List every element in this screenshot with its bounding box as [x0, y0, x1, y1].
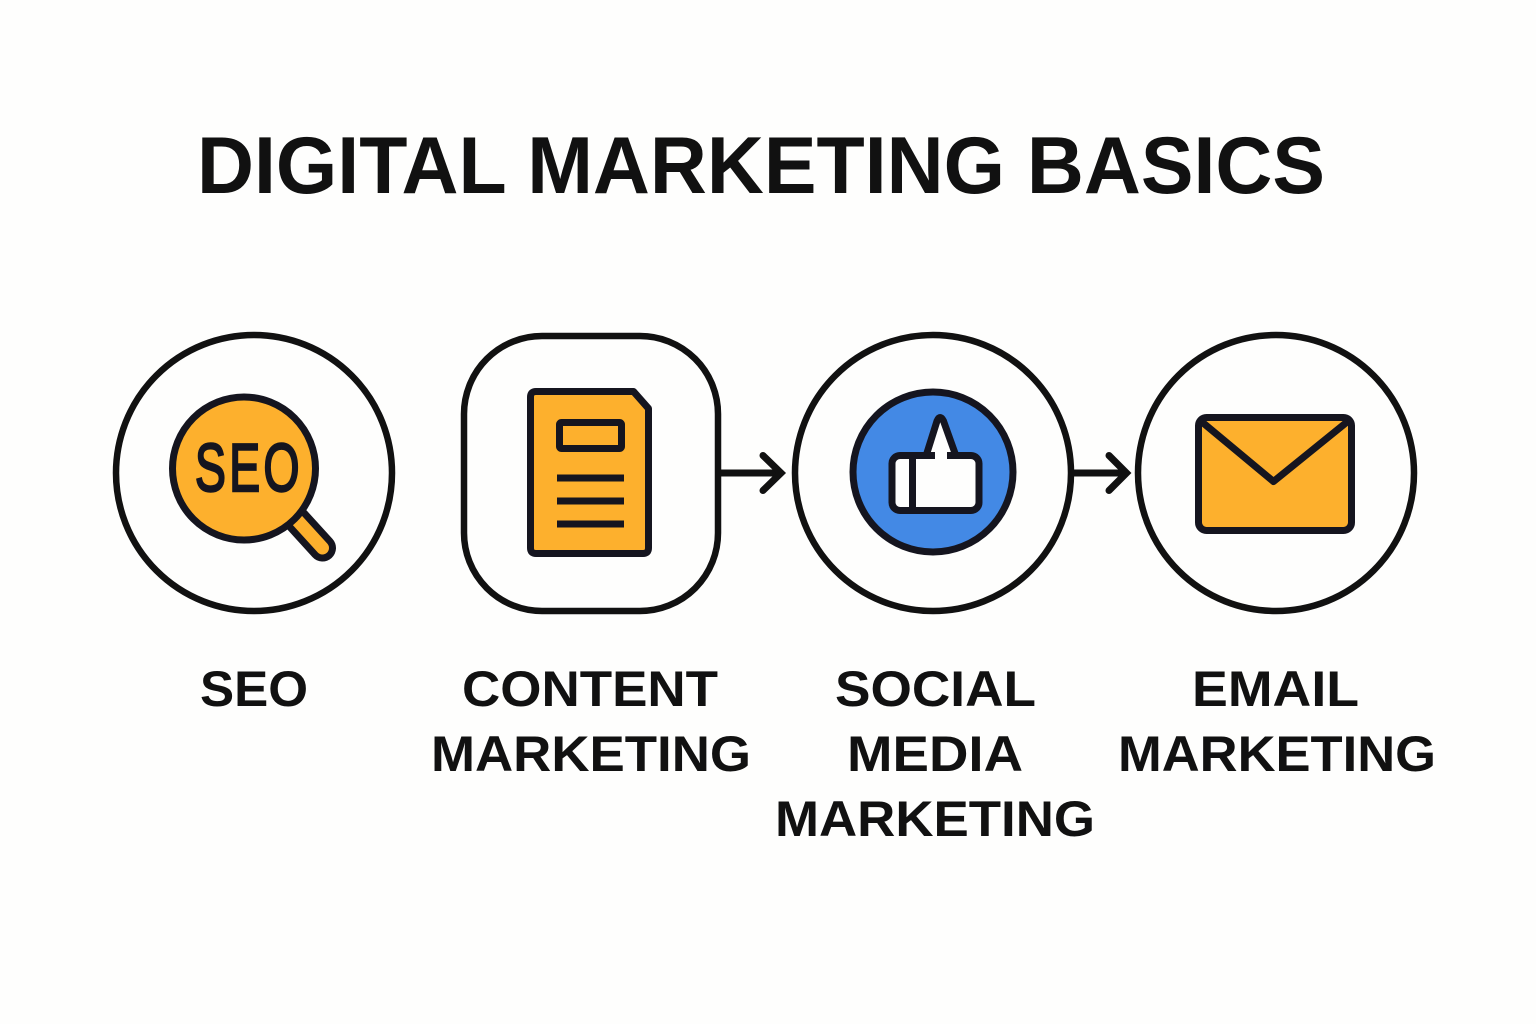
circle: SEO: [116, 335, 392, 611]
icon: document: [530, 392, 648, 554]
label: social media marketing: MARKETING: [775, 791, 1095, 847]
label: social media marketing: MEDIA: [847, 726, 1022, 782]
icon: SEO magnifier: SEO: [195, 430, 303, 506]
label: content marketing: CONTENT: [462, 661, 718, 717]
step: social media marketing: [775, 335, 1095, 847]
step: email marketing: [1118, 335, 1436, 782]
arrow: content to social: [720, 456, 781, 490]
icon: envelope: [1198, 418, 1352, 530]
icon: SEO magnifier: [172, 397, 322, 548]
icon: thumbs up: [853, 392, 1013, 552]
title: DIGITAL MARKETING BASICS: [197, 121, 1325, 211]
label: email marketing: EMAIL: [1192, 661, 1358, 717]
label: content marketing: MARKETING: [431, 726, 751, 782]
rounded square: content: [464, 336, 718, 611]
step: content marketing: [431, 336, 751, 782]
label: email marketing: MARKETING: [1118, 726, 1436, 782]
circle: email: [1138, 335, 1414, 611]
step: SEO: [116, 335, 392, 717]
label: social media marketing: SOCIAL: [835, 661, 1035, 717]
label: SEO: SEO: [200, 661, 308, 717]
circle: social: [795, 335, 1071, 611]
arrow: social to email: [1073, 456, 1126, 490]
